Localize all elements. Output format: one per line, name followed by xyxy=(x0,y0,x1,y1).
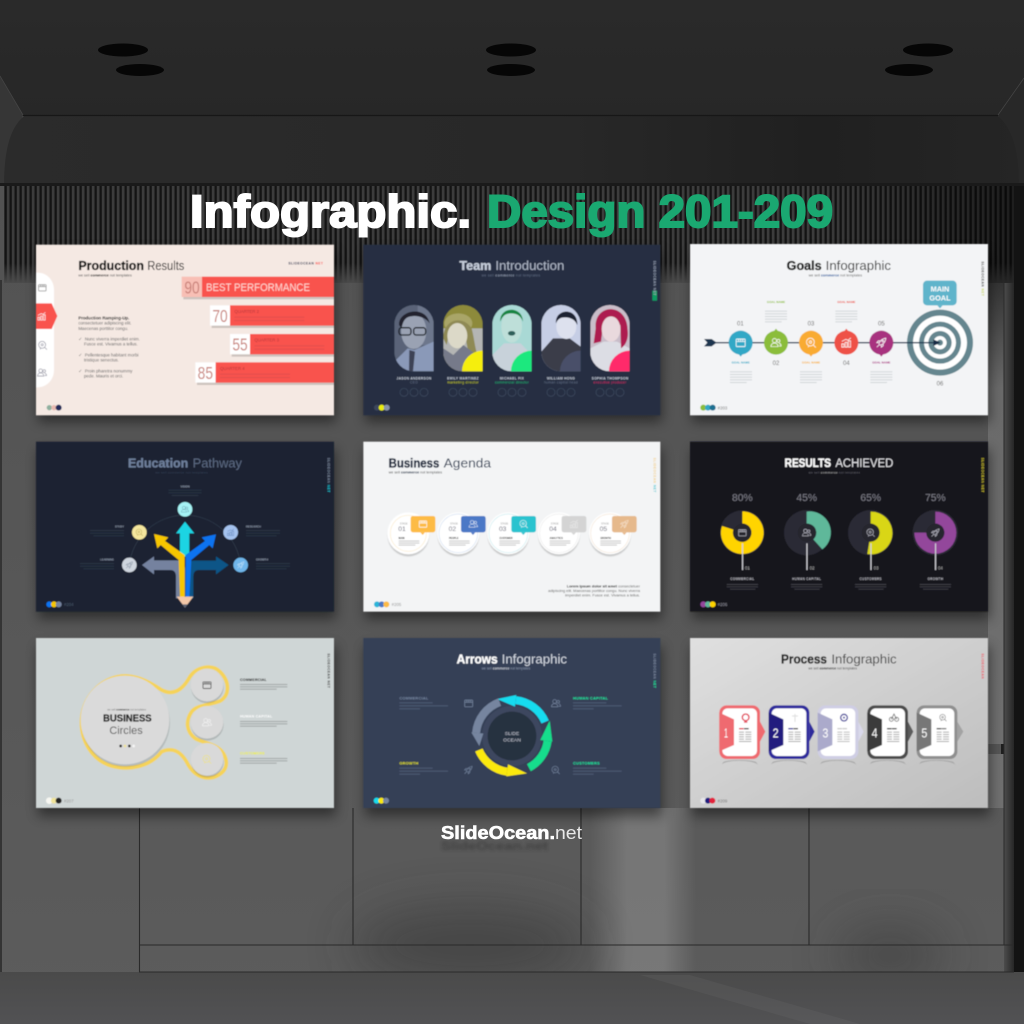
bar: quarter 3 55 xyxy=(230,334,334,357)
step: main: 01 xyxy=(398,526,406,533)
icon: customers circle xyxy=(191,743,224,778)
icon: footer dots and number xyxy=(700,798,728,804)
card: step 3 xyxy=(818,705,864,765)
heading: Business Agenda: Agenda xyxy=(444,456,492,470)
chart: donut 65%: 03 xyxy=(874,565,879,570)
text block: lorem ipsum: imperdiet enim. Fusce est. Vivamus a tellus. xyxy=(565,594,640,598)
circle: Business Circles hub: BUSINESS xyxy=(103,713,152,724)
step: people: PEOPLE xyxy=(449,538,459,540)
text: node captions xyxy=(80,485,290,569)
card: step 4 xyxy=(867,705,913,765)
text block: Production Ramping-Up xyxy=(78,315,140,379)
step: goal 4: GOAL NAME xyxy=(837,300,855,304)
text: customers xyxy=(240,752,287,764)
step: analytics xyxy=(538,512,586,554)
text: team names and roles: commercial director xyxy=(495,381,530,385)
icon: footer dots and number: #206 xyxy=(718,602,728,607)
heading: Production Results: Results xyxy=(147,259,184,273)
text: subtitle: we sell commerce not templates xyxy=(155,471,208,475)
text: team names and roles: MICHAEL FIX xyxy=(500,376,525,380)
arrow: yellow xyxy=(479,750,527,776)
panel: Education Pathway slide xyxy=(36,442,334,612)
icon: footer dots and number xyxy=(700,405,728,411)
text: SlideOcean.net footer: net xyxy=(555,823,582,843)
heading: Arrows Infographic: Infographic xyxy=(502,652,567,666)
heading: Business Agenda: Business xyxy=(389,456,439,470)
text: human capital: HUMAN CAPITAL xyxy=(240,715,273,719)
text: node captions: GROWTH xyxy=(256,558,268,562)
step: main: MAIN xyxy=(399,537,405,540)
step: goal 2: GOAL NAME xyxy=(767,300,785,304)
text: customers: CUSTOMERS xyxy=(573,761,600,766)
text: brand tag: SLIDEOCEAN NET xyxy=(980,261,984,296)
text block: Production Ramping-Up: Production Ramping-Up. xyxy=(78,315,129,320)
text block: Production Ramping-Up: ✓ Pellentesque habitant morbi xyxy=(78,352,139,357)
step: people xyxy=(437,512,486,554)
heading: Process Infographic: Infographic xyxy=(831,652,897,666)
text: subtitle: we sell commerce not templates xyxy=(809,471,861,475)
heading: Process Infographic: Process xyxy=(781,652,827,666)
panel: Production Results slide xyxy=(36,245,334,415)
heading: Results Achieved: ACHIEVED xyxy=(835,457,893,470)
text: step 06: 06 xyxy=(937,382,944,388)
text: subtitle: we sell commerce not templates xyxy=(78,273,132,277)
icon: footer dots xyxy=(374,405,390,411)
step: customer: STAGE xyxy=(500,522,509,525)
title xyxy=(190,186,833,237)
text block: Production Ramping-Up: tristique senectus. xyxy=(84,358,119,363)
text: team names and roles: human capital head xyxy=(544,381,578,385)
text: subtitle: we sell commerce not templates xyxy=(482,274,540,278)
heading: Arrows Infographic: Arrows xyxy=(457,652,498,666)
text: human capital xyxy=(551,695,622,709)
icon: footer dots and number xyxy=(46,601,74,607)
step: growth: 05 xyxy=(600,526,607,533)
callout: main goal xyxy=(923,281,957,308)
title: Design 201-209 xyxy=(487,186,833,237)
text: team names and roles xyxy=(396,376,629,385)
circle: Business Circles hub xyxy=(81,676,170,767)
step: goal 5: GOAL NAME xyxy=(872,360,890,364)
portrait: Michael Fix xyxy=(492,304,532,372)
text: commercial xyxy=(399,695,473,709)
step: growth: STAGE xyxy=(601,522,609,525)
text: brand tag: SLIDEOCEAN NET xyxy=(288,261,323,265)
text block: lorem ipsum: adipiscing elit. Maecenas porttitor congu. Nunc viverra xyxy=(548,589,641,593)
bar: quarter 2 70: QUARTER 2 xyxy=(234,309,260,314)
text: team names and roles: JASON ANDERSON xyxy=(396,376,432,380)
circle shadows xyxy=(388,515,631,556)
text: team names and roles: SOPHIA THOMPSON xyxy=(592,376,629,380)
icon: footer dots xyxy=(374,798,389,804)
heading: Goals Infographic: Infographic xyxy=(826,259,891,273)
bar: quarter 4 85: QUARTER 4 xyxy=(220,366,245,371)
icon: footer dots and number xyxy=(374,601,402,607)
text: growth: GROWTH xyxy=(399,761,418,766)
text: team names and roles: WILLIAM HONG xyxy=(547,376,575,380)
chart: donut 45% xyxy=(784,493,831,590)
arc connector xyxy=(129,515,241,565)
chart: target xyxy=(907,310,973,376)
panel: Business Circles slide xyxy=(36,638,334,808)
card: step 1: 1 xyxy=(724,725,728,740)
text: customers xyxy=(552,761,622,775)
text: subtitle: we sell commerce not templates xyxy=(482,667,531,671)
text: node captions: RESEARCH xyxy=(246,525,261,529)
chart: donut 65% xyxy=(848,493,893,590)
icon: right node xyxy=(223,525,238,540)
chart: donut 75%: 04 xyxy=(938,565,943,570)
chart: donut 75% xyxy=(913,493,958,590)
icon: far right node xyxy=(233,558,248,572)
text: subtitle: we sell commerce not templates xyxy=(809,273,862,277)
chart: circular arrows xyxy=(471,695,552,776)
step: goal 3: GOAL NAME xyxy=(802,360,820,364)
chart: donut 80%: 80% xyxy=(732,493,753,504)
step: goal 2: 02 xyxy=(773,361,780,367)
text: team names and roles: EMILY MARTINEZ xyxy=(447,376,479,380)
text: growth xyxy=(399,761,472,775)
panel: Results Achieved slide xyxy=(690,442,988,612)
icon: human capital circle xyxy=(191,706,224,741)
text: human capital: HUMAN CAPITAL xyxy=(573,695,608,700)
card: step 5: 5 xyxy=(921,725,927,740)
portrait: Sophia Thompson xyxy=(590,304,630,372)
chart: donut 65%: 65% xyxy=(860,493,881,504)
icon: social buttons xyxy=(400,388,624,396)
card: step 2: 2 xyxy=(773,725,779,740)
text: commercial xyxy=(240,678,287,690)
icon: footer dots and number xyxy=(46,797,74,804)
arrow: cyan xyxy=(497,695,545,722)
bar: quarter 2 70 xyxy=(210,305,334,328)
portrait: Emily Martinez xyxy=(442,304,484,372)
icon: ceiling spotlights xyxy=(98,44,953,76)
text block: Production Ramping-Up: consectetuer adipiscing elit. xyxy=(78,321,132,326)
callout: main goal: MAIN xyxy=(931,285,949,294)
step: growth xyxy=(589,512,637,554)
text: slide ocean centre: SLIDE xyxy=(505,731,520,737)
text: slide ocean centre: OCEAN xyxy=(503,737,521,743)
chart: donut 75%: 75% xyxy=(925,493,946,504)
icon: footer dots and number: #204 xyxy=(64,602,74,607)
text: slide ocean centre xyxy=(503,731,521,743)
arrow: green xyxy=(529,721,552,768)
step: analytics: ANALYTICS xyxy=(550,537,563,540)
bar: quarter 3 55: QUARTER 3 xyxy=(254,338,280,343)
step: people: 02 xyxy=(449,526,456,533)
text block: Production Ramping-Up: ✓ Nunc viverra imperdiet enim. xyxy=(78,336,140,341)
text: team names and roles: executive producer xyxy=(594,381,627,385)
text: brand tag: SLIDEOCEAN NET xyxy=(326,653,330,688)
text: brand tag: SLIDEOCEAN NET xyxy=(653,458,657,493)
heading: Team Introduction: Team xyxy=(459,259,491,273)
panel: Business Agenda slide xyxy=(363,442,660,612)
step: analytics: 04 xyxy=(549,526,557,533)
icon: footer dots and number: #207 xyxy=(64,798,74,803)
step: goal 1: 01 xyxy=(737,321,744,327)
text: brand tag: SLIDEOCEAN NET xyxy=(653,261,657,296)
circle: Business Circles hub: we sell commerce not templates xyxy=(107,707,147,711)
step: customer: 03 xyxy=(499,526,507,533)
text: SlideOcean.net footer: SlideOcean. xyxy=(441,823,555,843)
text block: lorem ipsum xyxy=(548,585,641,598)
chart: donut 45%: 02 xyxy=(810,565,815,570)
text: subtitle: we sell commerce not templates xyxy=(808,667,857,671)
text: node captions: STUDY xyxy=(115,525,124,529)
slide shadows xyxy=(38,252,990,816)
bar: best performance 90: BEST PERFORMANCE xyxy=(206,282,310,294)
text: brand tag: SLIDEOCEAN NET xyxy=(980,458,984,493)
arrow: grey xyxy=(471,702,500,746)
chart: donut 80% xyxy=(720,493,765,590)
icon: commercial circle xyxy=(191,669,224,703)
heading: Production Results: Production xyxy=(78,259,144,273)
heading: Results Achieved: RESULTS xyxy=(785,457,831,470)
bar: quarter 3 55: 55 xyxy=(232,335,248,355)
text: human capital xyxy=(240,715,287,727)
text: team names and roles: CEO xyxy=(410,381,418,385)
text: SlideOcean.net footer: SlideOcean.net xyxy=(441,839,548,853)
text: subtitle: we sell commerce not templates xyxy=(389,471,442,475)
connector: yellow outline xyxy=(82,667,227,778)
title: Infographic. xyxy=(190,186,471,237)
step: growth: GROWTH xyxy=(600,538,611,540)
text: node captions: LEARNING xyxy=(100,558,114,562)
icon: far left node xyxy=(122,558,137,572)
chart: donut 65%: CUSTOMERS xyxy=(860,577,882,581)
step: customer xyxy=(487,512,536,554)
step: goal 5: 05 xyxy=(878,321,885,327)
step: people: STAGE xyxy=(450,522,458,525)
step: main: STAGE xyxy=(400,522,408,525)
icon: footer dots and number xyxy=(700,601,728,607)
bar: quarter 4 85 xyxy=(195,362,334,385)
card: step 2 xyxy=(769,705,815,765)
chart: donut 45%: 45% xyxy=(796,493,817,504)
bar: quarter 2 70: 70 xyxy=(212,306,228,326)
bar: best performance 90: 90 xyxy=(184,277,200,297)
heading: Education Pathway: Education xyxy=(128,456,188,470)
circle: Business Circles hub: Circles xyxy=(109,725,143,737)
step: customer: CUSTOMER xyxy=(499,538,513,540)
step: goal 4: 04 xyxy=(843,361,850,367)
text: SlideOcean.net footer xyxy=(441,823,582,853)
portrait: William Hong xyxy=(540,304,582,372)
chart: donut 80%: 01 xyxy=(745,565,750,570)
bar: quarter 4 85: 85 xyxy=(198,363,213,383)
text block: Production Ramping-Up: ✓ Proin pharetra nonummy xyxy=(78,368,133,373)
arrow: timeline xyxy=(704,339,941,346)
text: brand tag: SLIDEOCEAN xyxy=(980,653,984,679)
text: customers: CUSTOMERS xyxy=(240,752,265,756)
step: goal 1 xyxy=(729,321,753,383)
chart: donut 75%: GROWTH xyxy=(927,577,944,581)
card: step 4: 4 xyxy=(872,725,878,740)
card: step 3: 3 xyxy=(822,725,828,740)
step: goal 3: 03 xyxy=(808,321,815,327)
text: commercial: COMMERCIAL xyxy=(240,678,267,682)
step: goal 1: GOAL NAME xyxy=(732,360,750,364)
text block: lorem ipsum: Lorem ipsum dolor sit amet consectetuer xyxy=(567,585,641,589)
step: goal 4 xyxy=(834,300,858,367)
card: step 5 xyxy=(917,705,963,765)
portrait: Jason Anderson xyxy=(394,305,434,371)
icon: footer dots xyxy=(47,405,62,411)
text: team names and roles: marketing director xyxy=(447,381,479,385)
text block: Production Ramping-Up: pede. Mauris et orci. xyxy=(84,374,123,379)
heading: Goals Infographic: Goals xyxy=(787,259,822,273)
step: goal 5 xyxy=(869,321,893,383)
panel: Arrows Infographic slide xyxy=(363,638,660,808)
card: step 1 xyxy=(719,705,765,765)
text: commercial: COMMERCIAL xyxy=(399,695,429,700)
chart: donut 80%: COMMERCIAL xyxy=(730,577,754,581)
step: analytics: STAGE xyxy=(551,522,559,525)
text block: Production Ramping-Up: Maecenas porttitor congu. xyxy=(78,326,128,331)
icon: footer dots and number: #209 xyxy=(718,798,728,803)
text: brand tag: SLIDEOCEAN NET xyxy=(653,653,657,688)
icon: centre node xyxy=(178,502,192,517)
icon: left node xyxy=(132,525,147,540)
heading: Team Introduction: Introduction xyxy=(495,259,564,273)
text: brand tag: SLIDEOCEAN NET xyxy=(326,458,330,493)
panel: Goals Infographic slide xyxy=(690,244,988,415)
text: node captions: VISION xyxy=(180,485,190,489)
panel: Team Introduction slide xyxy=(363,245,660,415)
bar: best performance 90 xyxy=(182,277,334,299)
arrows: pencil pathway xyxy=(142,522,229,608)
icon: footer dots and number: #205 xyxy=(392,602,402,607)
step: goal 2 xyxy=(764,300,788,367)
heading: Education Pathway: Pathway xyxy=(193,456,243,470)
panel: Process Infographic slide xyxy=(690,638,988,808)
chart: donut 45%: HUMAN CAPITAL xyxy=(792,577,821,581)
sidebar navigation xyxy=(36,273,57,387)
step: main xyxy=(387,512,435,554)
text block: Production Ramping-Up: Fusce est. Vivamus a tellus. xyxy=(84,342,138,347)
step: goal 3 xyxy=(799,321,823,383)
icon: footer dots and number: #203 xyxy=(718,405,728,410)
callout: main goal: GOAL xyxy=(929,293,951,302)
